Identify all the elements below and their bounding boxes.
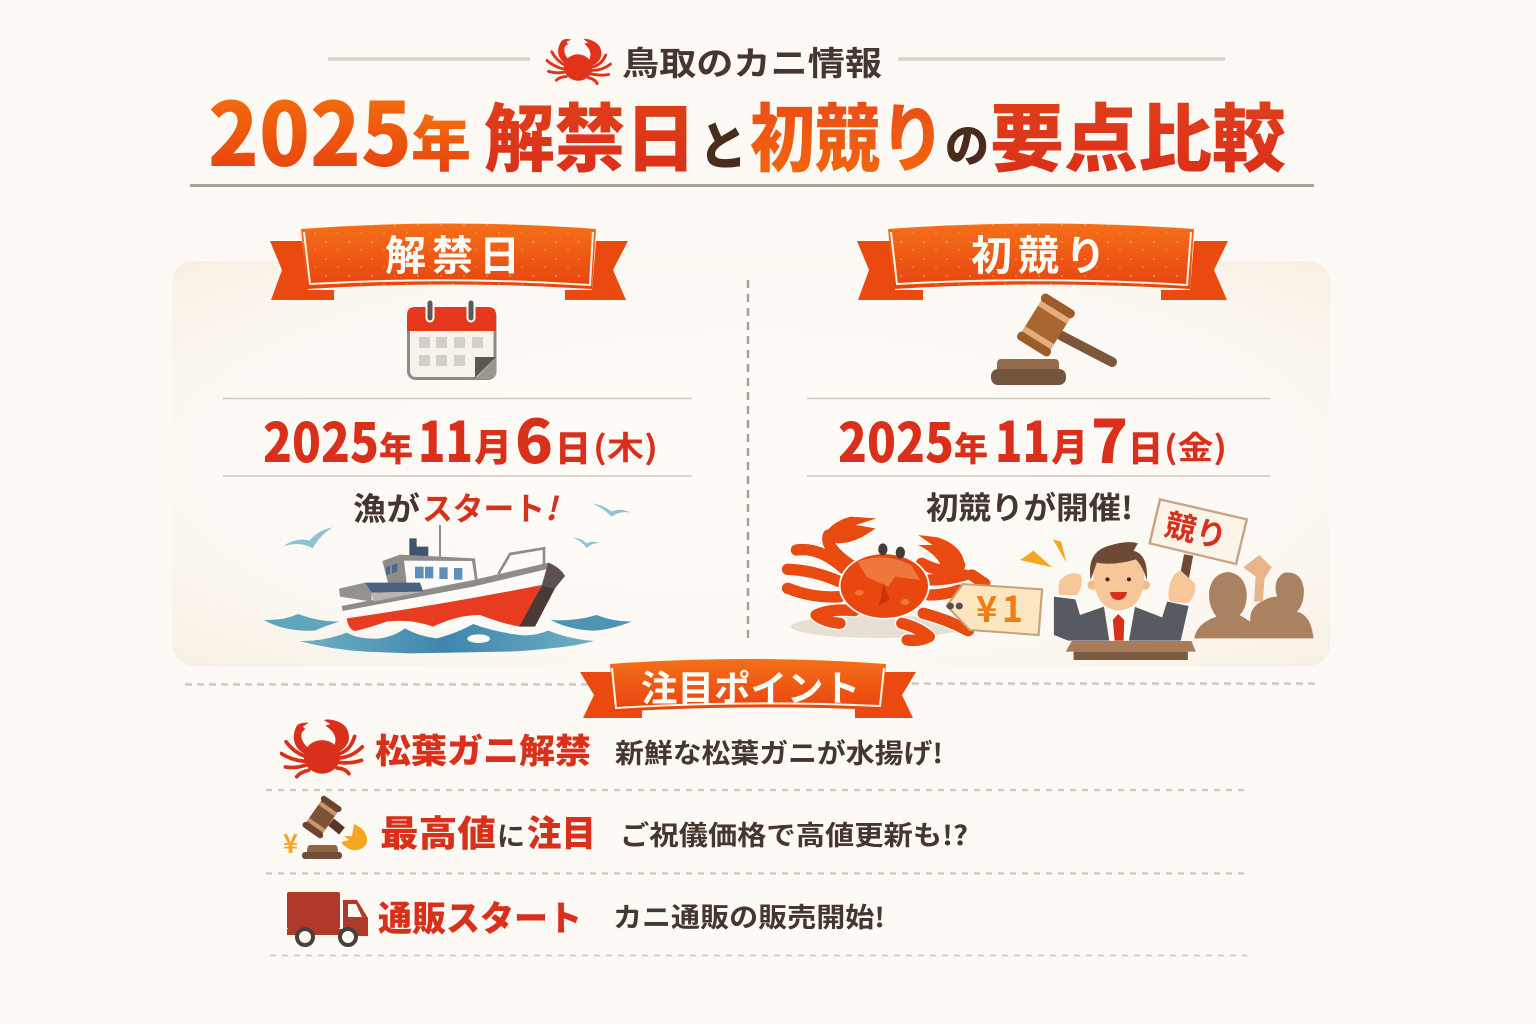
sign board xyxy=(1150,499,1247,564)
illustration: fishing boat xyxy=(264,503,632,653)
ribbon: 初競り xyxy=(857,222,1228,300)
left claw xyxy=(824,517,876,543)
icon: gavel with yen: ¥ xyxy=(283,824,298,861)
gulls xyxy=(283,503,631,548)
foredeck xyxy=(339,583,372,602)
date: 解禁日 xyxy=(263,394,658,481)
date: 解禁日: (木) xyxy=(593,423,658,469)
point row: 最高値に注目 xyxy=(283,795,968,861)
icon: delivery truck xyxy=(287,892,368,945)
ribbon: 注目ポイント: 注目ポイント xyxy=(641,660,860,712)
date: 初競り: (金) xyxy=(1164,423,1227,469)
price tag text: ¥ 1 xyxy=(976,581,1023,633)
rear waves xyxy=(264,614,339,631)
crab shell xyxy=(840,553,929,619)
mast and funnel xyxy=(437,525,443,557)
title: 解禁日 xyxy=(484,80,696,187)
title: 2025 xyxy=(208,65,412,192)
point row: 通販スタート xyxy=(287,891,885,945)
icon: crab xyxy=(281,719,362,777)
icon: gavel xyxy=(991,292,1112,385)
date: 初競り: 11 xyxy=(995,398,1050,479)
date: 解禁日: 6 xyxy=(515,394,553,481)
illustration: crab with price tag xyxy=(788,517,1042,640)
title: の xyxy=(945,110,989,176)
head xyxy=(1087,580,1097,590)
date: 初競り: 月 xyxy=(1051,417,1088,472)
eyebrow text: 鳥取のカニ情報 xyxy=(622,37,882,85)
date rules xyxy=(223,398,1270,476)
illustration: auctioneer and crowd xyxy=(1020,499,1314,660)
date: 解禁日: 11 xyxy=(418,398,473,479)
row heading: 松葉ガニ解禁 xyxy=(375,724,591,773)
ribbon: 初競り: 初競り xyxy=(971,222,1106,282)
icon: crab xyxy=(544,34,614,87)
raised arm xyxy=(1243,555,1272,602)
front waves xyxy=(299,624,594,653)
dashed rule above points xyxy=(185,684,1318,685)
hands xyxy=(1059,573,1082,595)
caption: 漁がスタート: 漁が xyxy=(353,484,420,530)
caption: 漁がスタート: スタート xyxy=(422,484,545,530)
icon: calendar xyxy=(407,303,496,379)
title: 要点比較 xyxy=(990,80,1286,187)
panel: comparison xyxy=(172,261,1330,666)
podium xyxy=(1066,641,1196,652)
point row: 松葉ガニ解禁 xyxy=(281,719,943,777)
caption: 漁がスタート: ! xyxy=(545,484,560,530)
sparks xyxy=(1020,551,1052,567)
sign pole xyxy=(1180,555,1189,601)
icon: gavel with yen xyxy=(283,795,367,861)
date: 初競り: 日 xyxy=(1128,420,1163,472)
row heading: 最高値 xyxy=(380,805,496,857)
date: 解禁日: 月 xyxy=(474,417,512,472)
hull xyxy=(343,569,548,632)
title: 初競り xyxy=(750,80,945,187)
cabin xyxy=(382,555,478,592)
sign text: 競り xyxy=(1161,499,1232,557)
ribbon: 解禁日 xyxy=(270,222,628,300)
title: 年 xyxy=(411,97,471,184)
date: 初競り xyxy=(838,394,1227,481)
right claw xyxy=(918,535,965,569)
ribbon: 解禁日: 解禁日 xyxy=(385,222,520,282)
price tag shape xyxy=(947,584,1042,635)
ribbon: 注目ポイント xyxy=(580,659,916,718)
caption: 漁がスタート xyxy=(353,484,560,530)
point row: 最高値に注目: に xyxy=(497,815,525,854)
title xyxy=(190,65,1314,192)
row heading: 通販スタート xyxy=(378,891,582,942)
suit xyxy=(1054,597,1189,641)
caption: 初競りが開催: 初競りが開催! xyxy=(926,483,1133,528)
railing xyxy=(498,548,544,574)
date: 初競り: 年 xyxy=(954,422,988,471)
date: 解禁日: 2025 xyxy=(263,399,379,478)
row description: カニ通販の販売開始! xyxy=(613,896,885,935)
row description: ご祝儀価格で高値更新も!? xyxy=(620,814,968,853)
header eyebrow: crab icon and site name xyxy=(328,34,1225,87)
date: 解禁日: 日 xyxy=(555,420,591,472)
date: 初競り: 7 xyxy=(1091,394,1128,481)
point row: 最高値に注目: 注目 xyxy=(527,805,596,857)
row description: 新鮮な松葉ガニが水揚げ! xyxy=(615,732,943,771)
date: 解禁日: 年 xyxy=(379,422,413,471)
date: 初競り: 2025 xyxy=(838,399,954,478)
title: と xyxy=(699,105,747,180)
crowd xyxy=(1194,572,1314,638)
